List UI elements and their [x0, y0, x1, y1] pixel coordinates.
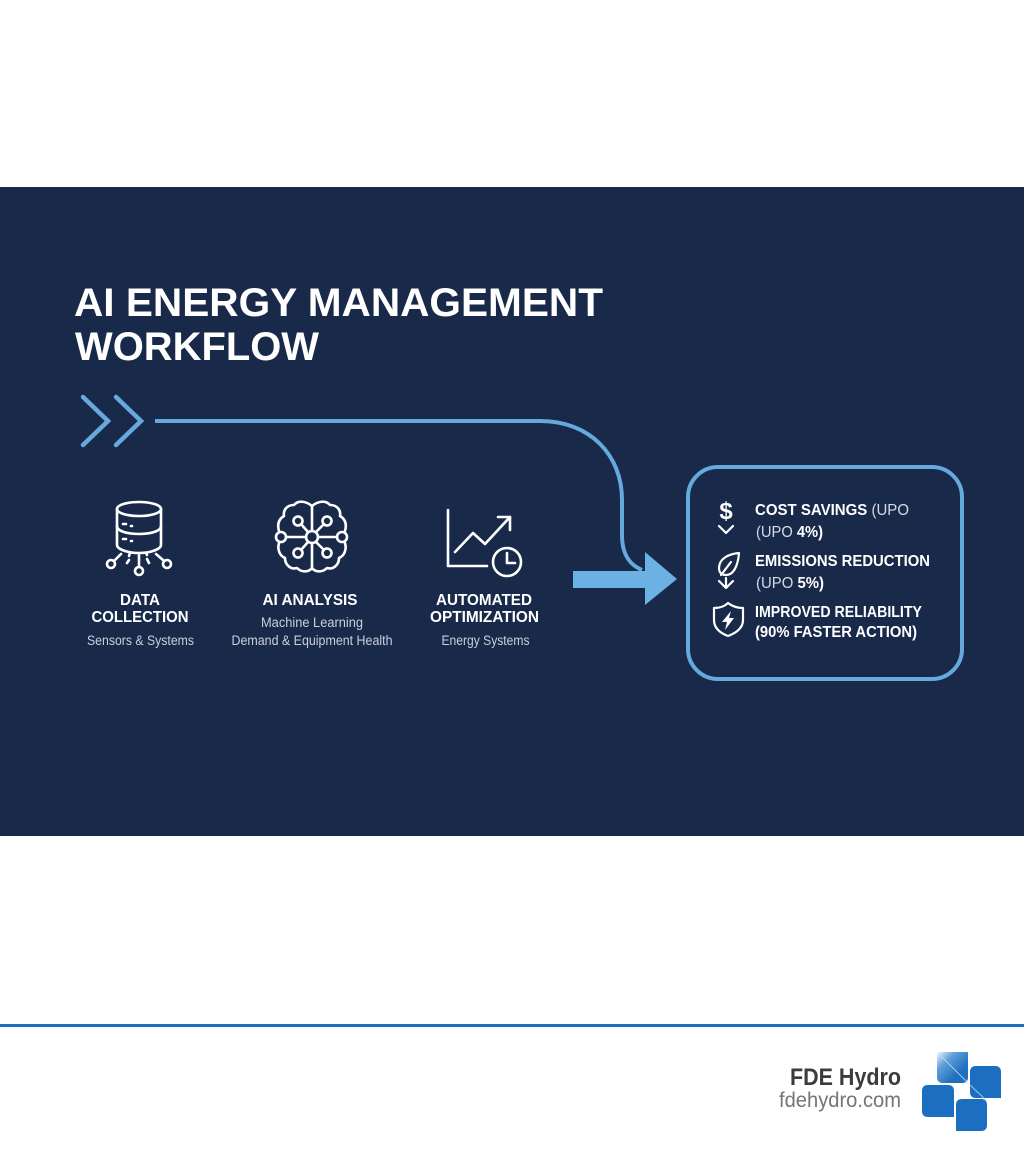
icon: leaf with down arrow [719, 553, 739, 588]
footer brand text: fdehydro.com [779, 1089, 901, 1112]
outcome: emissions reduction: (UPO 5%) [756, 575, 824, 592]
arrow: curved connector line [155, 421, 642, 570]
outcome: cost savings [755, 502, 909, 541]
panel: dark navy band [0, 187, 1024, 836]
outcome: improved reliability: IMPROVED RELIABILITY [755, 604, 923, 621]
icon: dollar with down chevron: $ [719, 498, 733, 525]
step label: automated optimization: AUTOMATED [436, 592, 532, 609]
icon: shield with lightning bolt [714, 603, 743, 636]
step caption: energy systems: Energy Systems [442, 633, 530, 648]
step label: data collection [92, 592, 188, 626]
step label: automated optimization [430, 592, 539, 626]
panel: outcomes box [688, 467, 962, 679]
title: WORKFLOW [75, 325, 319, 369]
arrow: block arrow to outcomes [573, 552, 677, 605]
outcome: cost savings: (UPO 4%) [756, 524, 823, 541]
logo: FDE Hydro four squares [922, 1052, 1001, 1131]
step caption: sensors and systems: Sensors & Systems [87, 633, 194, 648]
step caption: machine learning: Demand & Equipment Health [232, 633, 392, 648]
icon: rising chart with clock [448, 510, 521, 576]
outcome: cost savings: COST SAVINGS (UPO [755, 502, 909, 519]
step caption: machine learning [232, 615, 392, 648]
step: automated optimization [430, 510, 539, 648]
step: ai analysis [232, 502, 392, 648]
step: data collection [87, 502, 194, 648]
icon: brain network [276, 502, 347, 571]
title [74, 281, 603, 369]
title: AI ENERGY MANAGEMENT [74, 281, 603, 325]
step label: automated optimization: OPTIMIZATION [430, 609, 539, 626]
step caption: machine learning: Machine Learning [261, 615, 363, 630]
outcome: improved reliability: (90% FASTER ACTION) [755, 624, 917, 641]
icon: database with sensor nodes [107, 502, 171, 575]
step label: data collection: COLLECTION [92, 609, 188, 626]
icon: double chevron [83, 397, 141, 445]
step label: ai analysis: AI ANALYSIS [262, 592, 358, 609]
step label: data collection: DATA [120, 592, 160, 609]
footer rule [0, 1024, 1024, 1027]
outcome: emissions reduction: EMISSIONS REDUCTION [755, 553, 930, 570]
outcome: improved reliability [755, 604, 923, 641]
footer brand text: FDE Hydro [790, 1064, 901, 1091]
footer brand text [779, 1064, 901, 1112]
outcome: emissions reduction [755, 553, 930, 592]
